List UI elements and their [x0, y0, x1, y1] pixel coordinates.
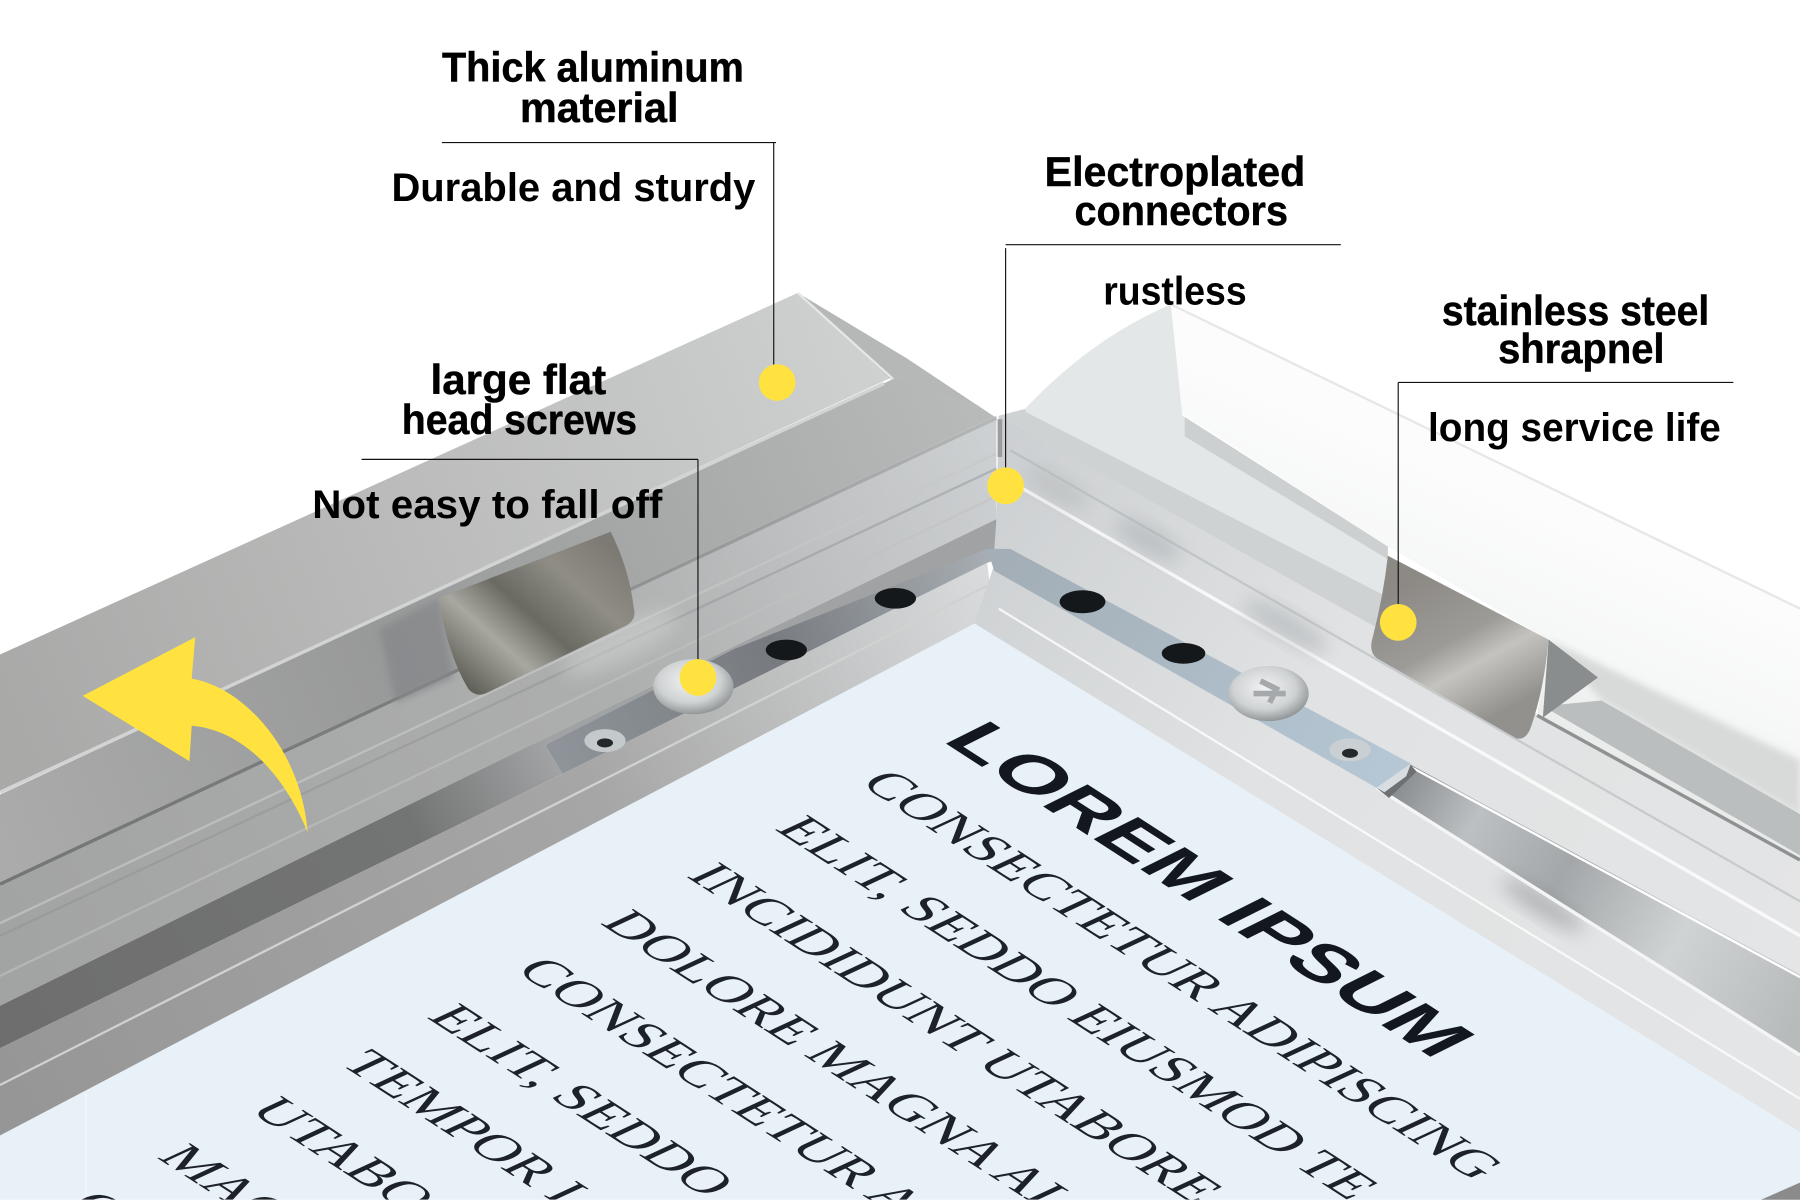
callout: electroplated connectors [987, 149, 1341, 504]
poster sheet with lorem ipsum text [0, 624, 1800, 1200]
poster sheet with lorem ipsum text: ELIT, SEDDO [415, 997, 750, 1200]
holes [766, 640, 807, 660]
poster sheet with lorem ipsum text: LOREM IPSUM [927, 712, 1493, 1067]
left screw [653, 659, 734, 714]
callout: thick aluminum material: material [520, 85, 678, 131]
stainless steel clip, right [1371, 556, 1549, 739]
poster sheet with lorem ipsum text: ELIT, SEDDO EIUSMOD TE [763, 809, 1393, 1200]
callout: large flat head screws: large flat [430, 357, 606, 403]
callout: stainless steel shrapnel: long service life [1428, 405, 1721, 450]
callout: electroplated connectors: connectors [1074, 188, 1288, 234]
right frame profile [975, 304, 1800, 1200]
callout: stainless steel shrapnel [1380, 288, 1733, 641]
callout: stainless steel shrapnel: stainless steel [1442, 288, 1709, 334]
poster sheet with lorem ipsum text: INCIDIDUNT UTABORE [675, 856, 1238, 1200]
stainless steel clip, left [379, 532, 634, 703]
callout: thick aluminum material: Durable and sturdy [391, 165, 756, 210]
callout: large flat head screws: head screws [402, 397, 637, 443]
callout: large flat head screws: Not easy to fall off [312, 482, 663, 527]
yellow curved arrow [83, 637, 308, 832]
bracket plate right [987, 549, 1411, 788]
right screw [1228, 666, 1309, 721]
callout: stainless steel shrapnel: shrapnel [1498, 326, 1665, 372]
left frame profile [0, 293, 996, 1136]
callout: thick aluminum material: Thick aluminum [442, 45, 744, 91]
callout: electroplated connectors: Electroplated [1045, 149, 1305, 195]
poster sheet with lorem ipsum text: CONSECTETUR ADIPISCING [848, 763, 1518, 1186]
bracket plate left [545, 549, 1010, 774]
callout: thick aluminum material [391, 45, 796, 401]
callout: large flat head screws [312, 357, 716, 696]
corner bracket with screws [545, 549, 1411, 792]
callout: electroplated connectors: rustless [1103, 268, 1247, 313]
